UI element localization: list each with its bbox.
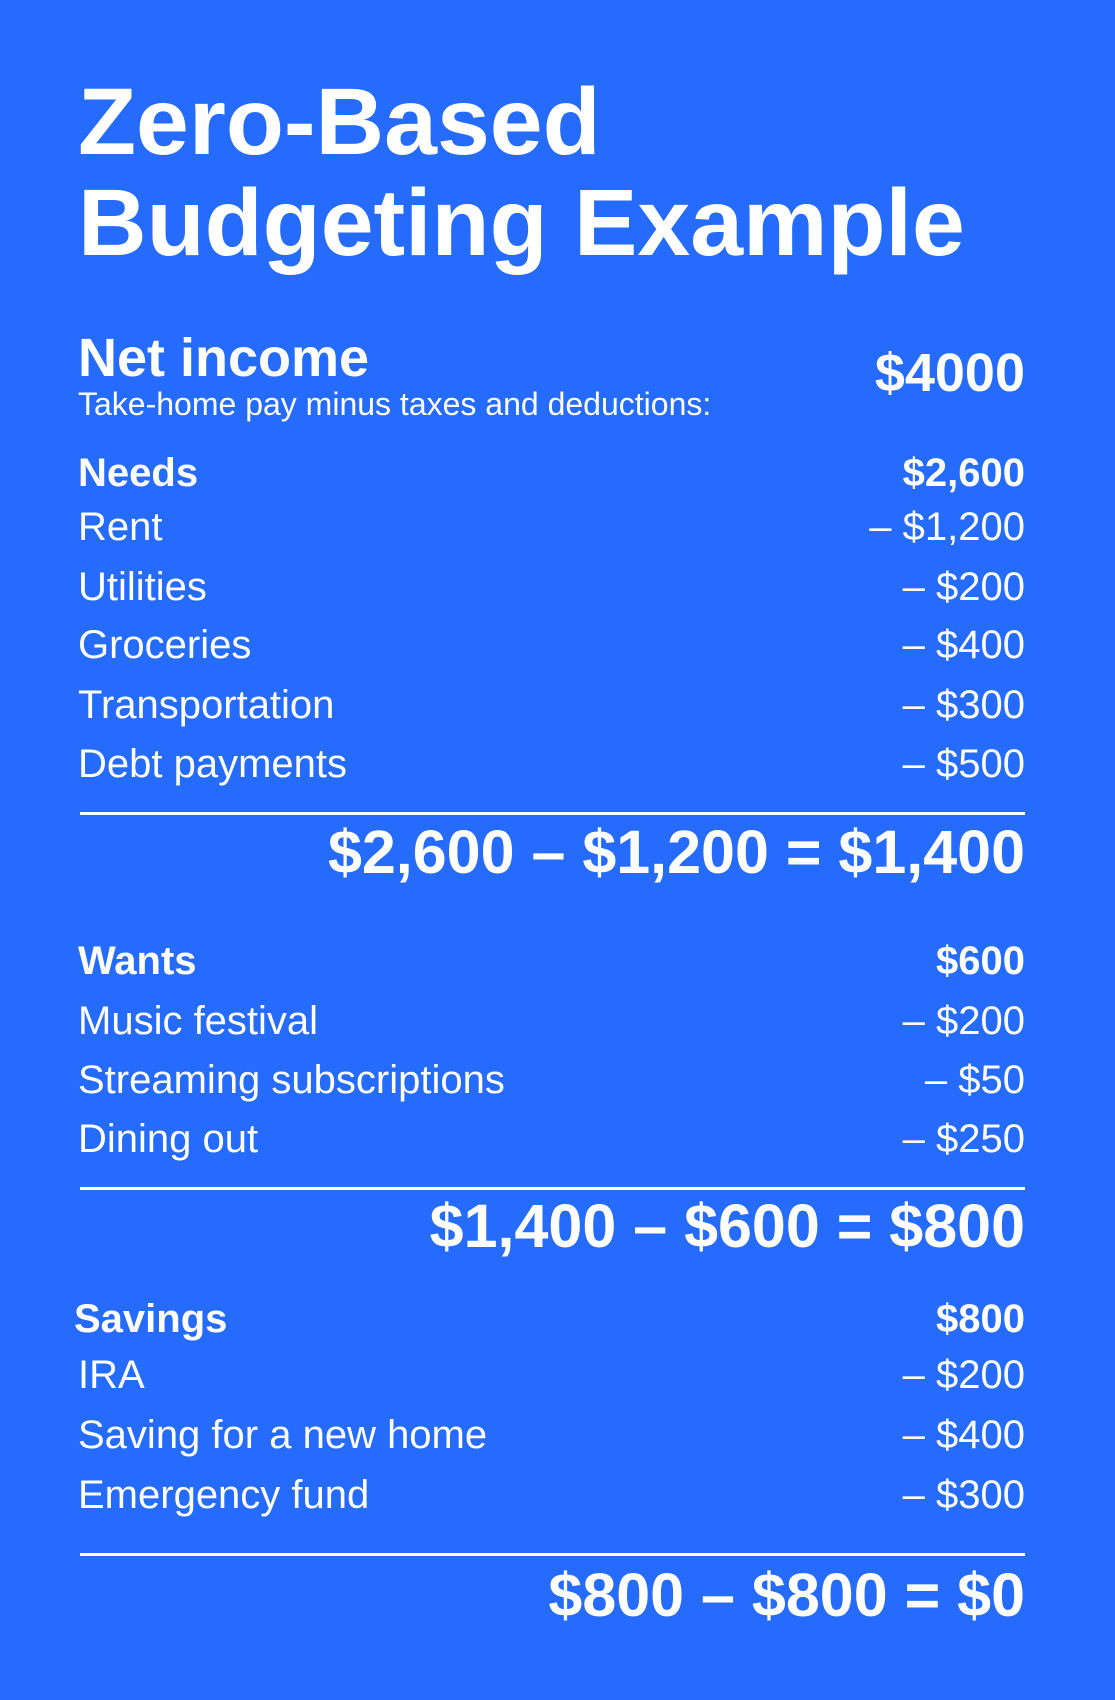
- needs heading: [78, 451, 1025, 495]
- panel: savings: IRA: [78, 1353, 145, 1397]
- panel: wants: – $50: [925, 1058, 1025, 1102]
- panel: savings: – $300: [903, 1473, 1025, 1517]
- panel: needs: Transportation: [78, 683, 334, 727]
- wants heading: $600: [936, 939, 1025, 983]
- panel: needs: – $1,200: [869, 505, 1025, 549]
- panel: needs: – $300: [903, 683, 1025, 727]
- panel: wants: – $250: [903, 1117, 1025, 1161]
- panel: wants: – $200: [903, 999, 1025, 1043]
- needs heading: $2,600: [903, 451, 1025, 495]
- wants heading: Wants: [78, 939, 197, 983]
- savings heading: $800: [936, 1297, 1025, 1341]
- panel: needs: – $200: [903, 565, 1025, 609]
- panel: savings: – $200: [903, 1353, 1025, 1397]
- panel: wants: Dining out: [78, 1117, 258, 1161]
- panel: needs: – $400: [903, 623, 1025, 667]
- savings equation: $800 – $800 = $0: [548, 1561, 1025, 1629]
- wants equation: $1,400 – $600 = $800: [430, 1192, 1025, 1260]
- panel: savings: Saving for a new home: [78, 1413, 487, 1457]
- title: [78, 69, 965, 276]
- title: Budgeting Example: [78, 170, 965, 276]
- panel: wants: Music festival: [78, 999, 318, 1043]
- panel: savings: – $400: [903, 1413, 1025, 1457]
- needs equation: $2,600 – $1,200 = $1,400: [328, 818, 1025, 886]
- panel: needs: Groceries: [78, 623, 251, 667]
- panel: wants: [78, 939, 1025, 1260]
- needs heading: Needs: [78, 451, 198, 495]
- panel: savings: [74, 1297, 1025, 1629]
- net income header: $4000: [875, 343, 1025, 403]
- panel: needs: Debt payments: [78, 742, 347, 786]
- net income header: Net income: [78, 328, 369, 388]
- net income header: Take-home pay minus taxes and deductions:: [78, 386, 711, 422]
- panel: needs: [78, 451, 1025, 886]
- panel: savings: Emergency fund: [78, 1473, 369, 1517]
- wants heading: [78, 939, 1025, 983]
- title: Zero-Based: [78, 69, 601, 175]
- panel: needs: Rent: [78, 505, 162, 549]
- panel: needs: Utilities: [78, 565, 207, 609]
- savings heading: [74, 1297, 1025, 1341]
- net income header: [78, 328, 1025, 422]
- panel: needs: – $500: [903, 742, 1025, 786]
- panel: wants: Streaming subscriptions: [78, 1058, 505, 1102]
- savings heading: Savings: [74, 1297, 227, 1341]
